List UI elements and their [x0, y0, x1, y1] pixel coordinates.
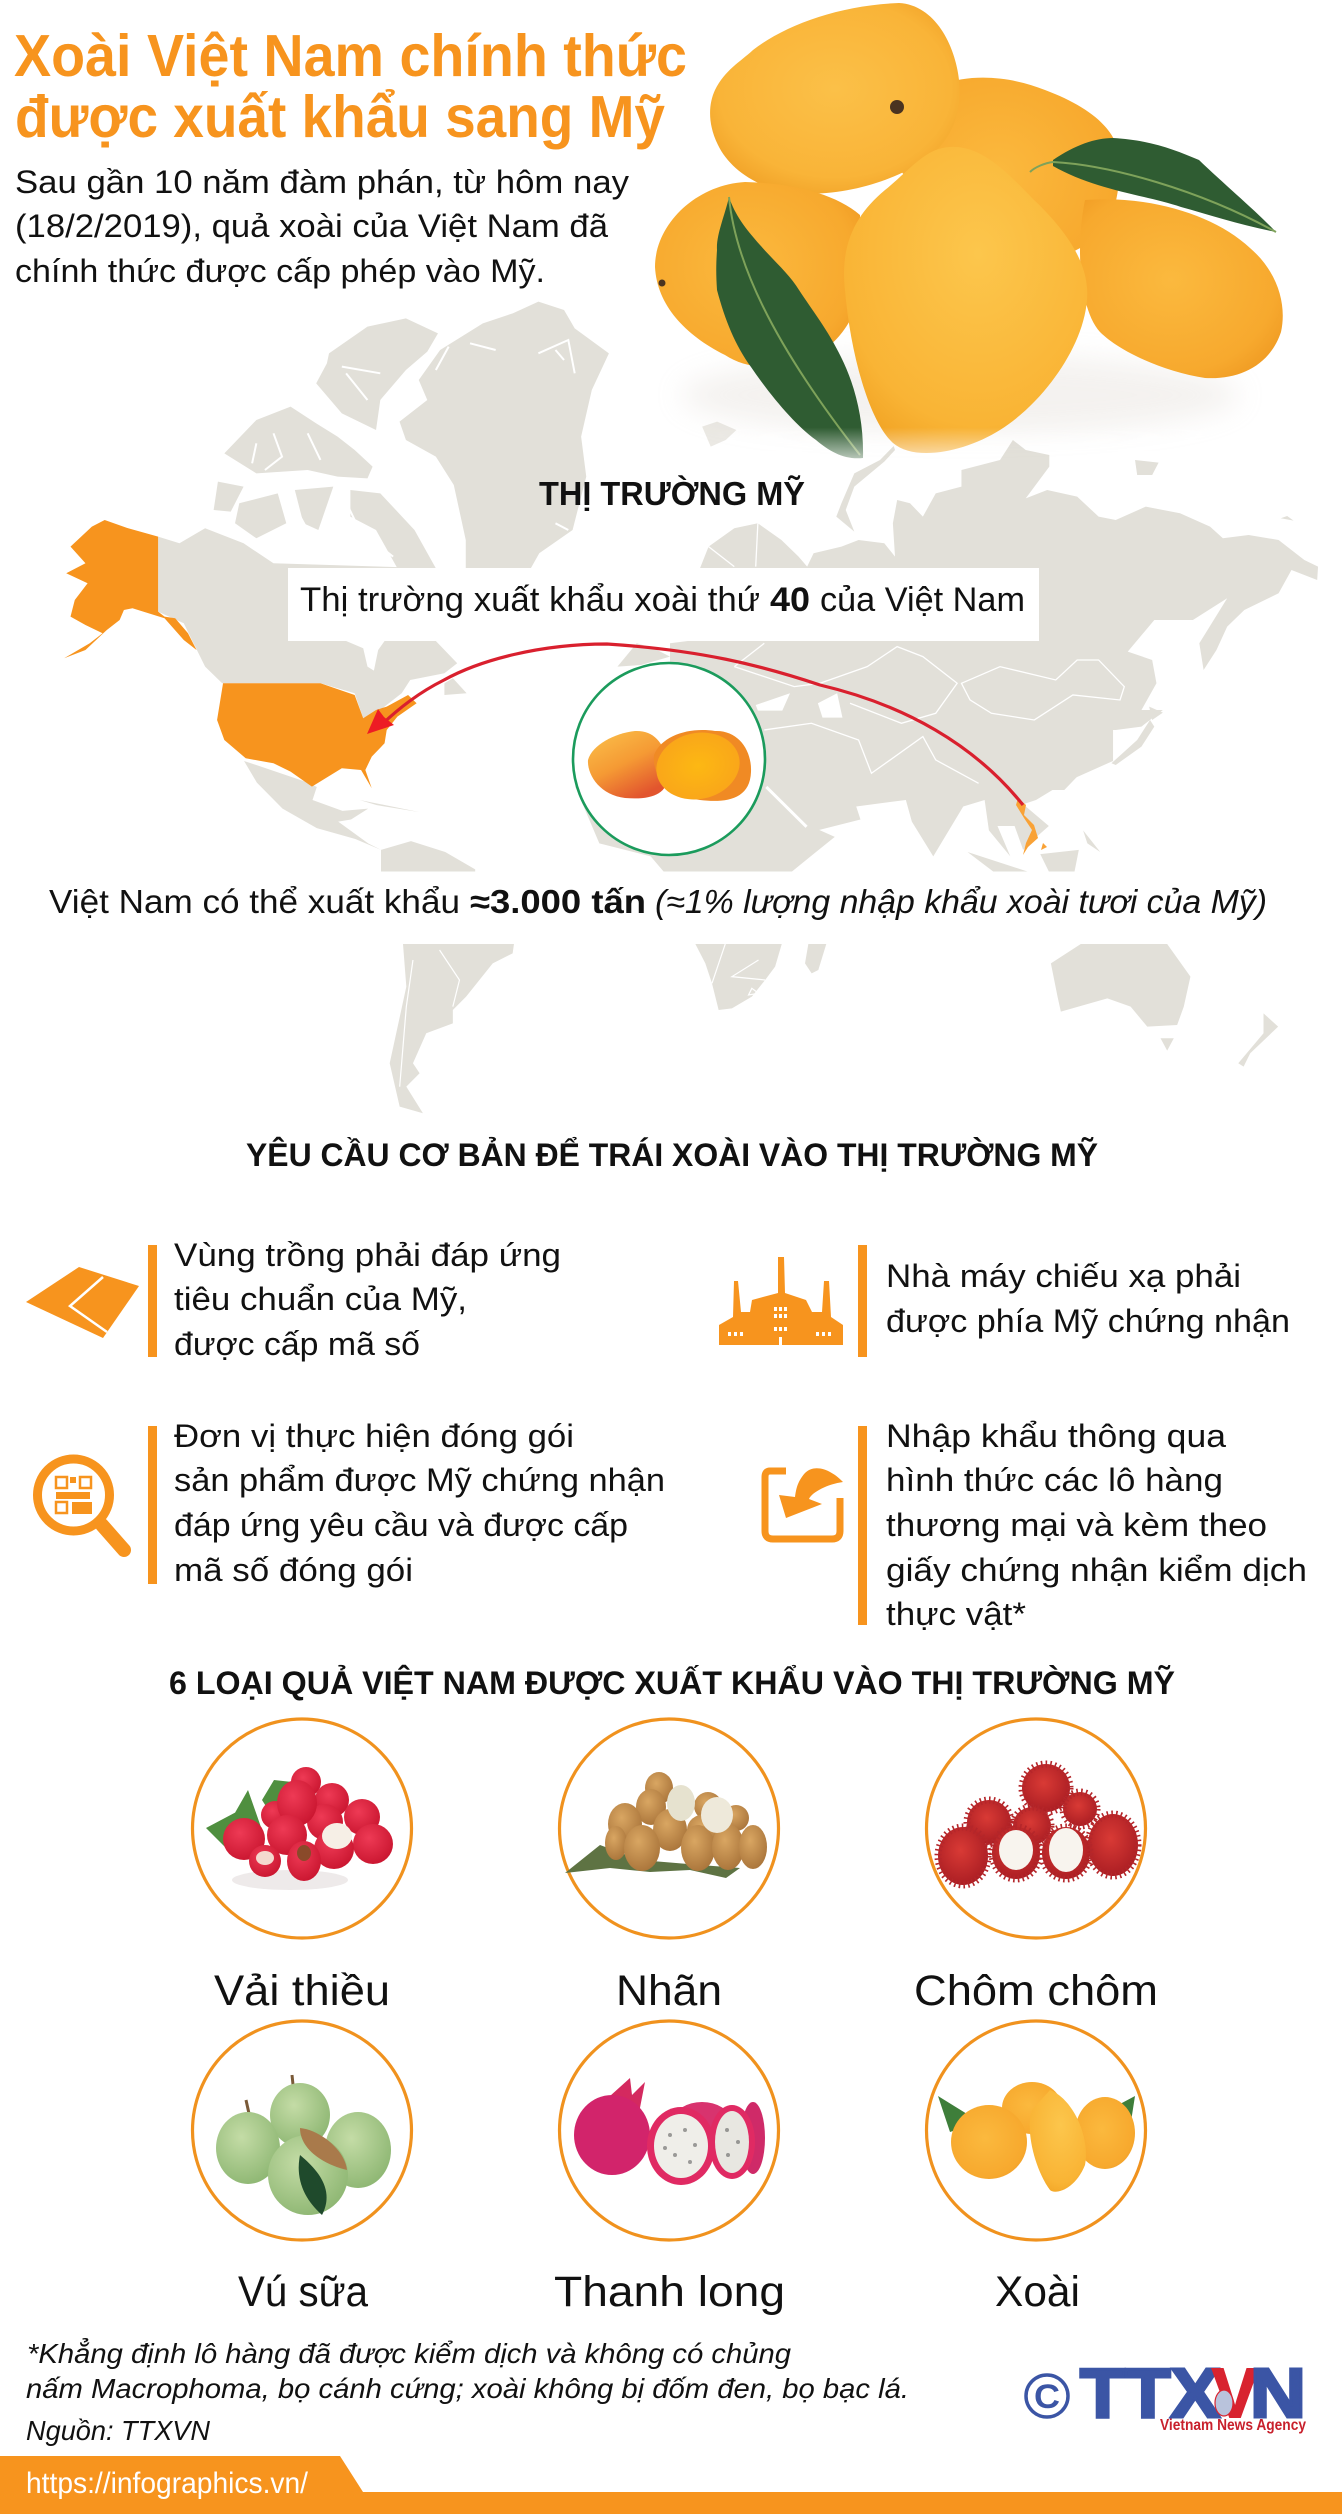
requirement: commercial shipment: thực vật* [886, 1596, 1026, 1632]
map: eurasia gray landmass [670, 422, 1318, 790]
arrow: vietnam to usa [367, 644, 1023, 805]
footnote: *Khẳng định lô hàng đã được kiểm dịch và không có chủng [27, 2337, 791, 2369]
title [14, 23, 687, 150]
requirement: irradiation plant: Nhà máy chiếu xạ phải [886, 1258, 1241, 1294]
icon: import arrow in box [765, 1468, 843, 1539]
fruit: dragon fruit [560, 2021, 778, 2240]
heading: six fruits: 6 LOẠI QUẢ VIỆT NAM ĐƯỢC XUẤT KHẨU VÀO THỊ TRƯỜNG MỸ [169, 1665, 1175, 1701]
requirement: commercial shipment: giấy chứng nhận kiểm dịch [886, 1552, 1307, 1588]
footnote [26, 2337, 909, 2446]
requirement: packaging unit: sản phẩm được Mỹ chứng nhận [174, 1462, 665, 1498]
icon: factory [719, 1257, 843, 1345]
mango centre [844, 147, 1087, 453]
mango back right [900, 78, 1119, 290]
label: dragon fruit: Thanh long [554, 2268, 785, 2316]
callout: 40th export market: Thị trường xuất khẩu xoài thứ [300, 581, 760, 619]
map: north america gray landmass [158, 302, 670, 718]
footnote: nấm Macrophoma, bọ cánh cứng; xoài không bị đốm đen, bọ bạc lá. [26, 2373, 909, 2404]
mango left [655, 182, 860, 367]
map: contiguous united states highlighted [217, 683, 417, 788]
footnote: Nguồn: TTXVN [26, 2415, 211, 2446]
icon: field plots [26, 1267, 139, 1338]
text block: export volume: (≈1% lượng nhập khẩu xoài tươi của Mỹ) [655, 883, 1267, 920]
callout: 40th export market: của Việt Nam [820, 581, 1025, 619]
label: lychee: Vải thiều [214, 1967, 390, 2015]
map: vietnam highlighted [1016, 798, 1047, 855]
callout: 40th export market [288, 568, 1039, 641]
footer bar with url [0, 2456, 1342, 2514]
logo: ttxvn: TTX [1080, 2354, 1220, 2432]
intro text block: chính thức được cấp phép vào Mỹ. [15, 253, 545, 289]
map: southern hemisphere landmass [390, 944, 1278, 1113]
fruit: star apple [192, 2021, 412, 2240]
requirement: commercial shipment: thương mại và kèm theo [886, 1507, 1267, 1543]
mango top left [710, 3, 960, 194]
intro text block [15, 164, 629, 289]
requirement: irradiation plant [719, 1245, 1290, 1357]
photo: pile of mangoes with leaves [655, 3, 1283, 458]
text block: export volume: Việt Nam có thể xuất khẩu [49, 883, 460, 920]
label: star apple: Vú sữa [238, 2268, 368, 2316]
mango right [1080, 199, 1283, 378]
requirement: growing area: Vùng trồng phải đáp ứng [174, 1237, 561, 1273]
fruit: rambutan [926, 1719, 1146, 1938]
requirement: packaging unit: đáp ứng yêu cầu và được cấp [174, 1507, 628, 1543]
requirement: growing area [26, 1237, 561, 1362]
intro text block: (18/2/2019), quả xoài của Việt Nam đã [15, 208, 608, 244]
panel: world map [0, 302, 1342, 1113]
requirement: packaging unit [38, 1418, 665, 1588]
map: alaska highlighted [64, 520, 197, 658]
label: mango: Xoài [995, 2268, 1080, 2316]
intro text block: Sau gần 10 năm đàm phán, từ hôm nay [15, 164, 629, 200]
logo: ttxvn: Vietnam News Agency [1160, 2417, 1306, 2434]
requirement: commercial shipment [765, 1418, 1307, 1632]
heading: us market: THỊ TRƯỜNG MỸ [539, 475, 805, 512]
label: rambutan: Chôm chôm [914, 1967, 1158, 2015]
requirement: irradiation plant: được phía Mỹ chứng nhận [886, 1303, 1290, 1339]
fruit: longan [560, 1719, 778, 1938]
icon: cut mango in green circle [573, 663, 765, 855]
footer bar with url: https://infographics.vn/ [26, 2467, 309, 2500]
fruit: lychee [192, 1719, 412, 1938]
map: south asia, africa and central america [244, 709, 1113, 872]
requirement: growing area: tiêu chuẩn của Mỹ, [174, 1281, 467, 1317]
label: longan: Nhãn [616, 1967, 722, 2015]
title: Xoài Việt Nam chính thức [14, 23, 687, 89]
logo: ttxvn: N [1250, 2354, 1306, 2432]
callout: 40th export market: 40 [770, 581, 810, 619]
requirement: packaging unit: mã số đóng gói [174, 1552, 413, 1588]
requirement: growing area: được cấp mã số [174, 1326, 420, 1362]
text block: export volume [49, 883, 1267, 920]
title: được xuất khẩu sang Mỹ [15, 84, 665, 150]
text block: export volume: ≈3.000 tấn [470, 883, 646, 920]
heading: requirements: YÊU CẦU CƠ BẢN ĐỂ TRÁI XOÀI VÀO THỊ TRƯỜNG MỸ [246, 1137, 1098, 1173]
requirement: commercial shipment: hình thức các lô hàng [886, 1462, 1223, 1498]
icon: magnifier with qr code [38, 1459, 124, 1550]
logo: ttxvn: C [1034, 2378, 1060, 2416]
leaf right [1030, 138, 1276, 232]
fruit: mango [926, 2021, 1146, 2240]
requirement: packaging unit: Đơn vị thực hiện đóng gói [174, 1418, 574, 1454]
logo: ttxvn: V [1212, 2354, 1258, 2432]
leaf left [716, 197, 863, 458]
logo: ttxvn [1026, 2354, 1306, 2434]
requirement: commercial shipment: Nhập khẩu thông qua [886, 1418, 1226, 1454]
